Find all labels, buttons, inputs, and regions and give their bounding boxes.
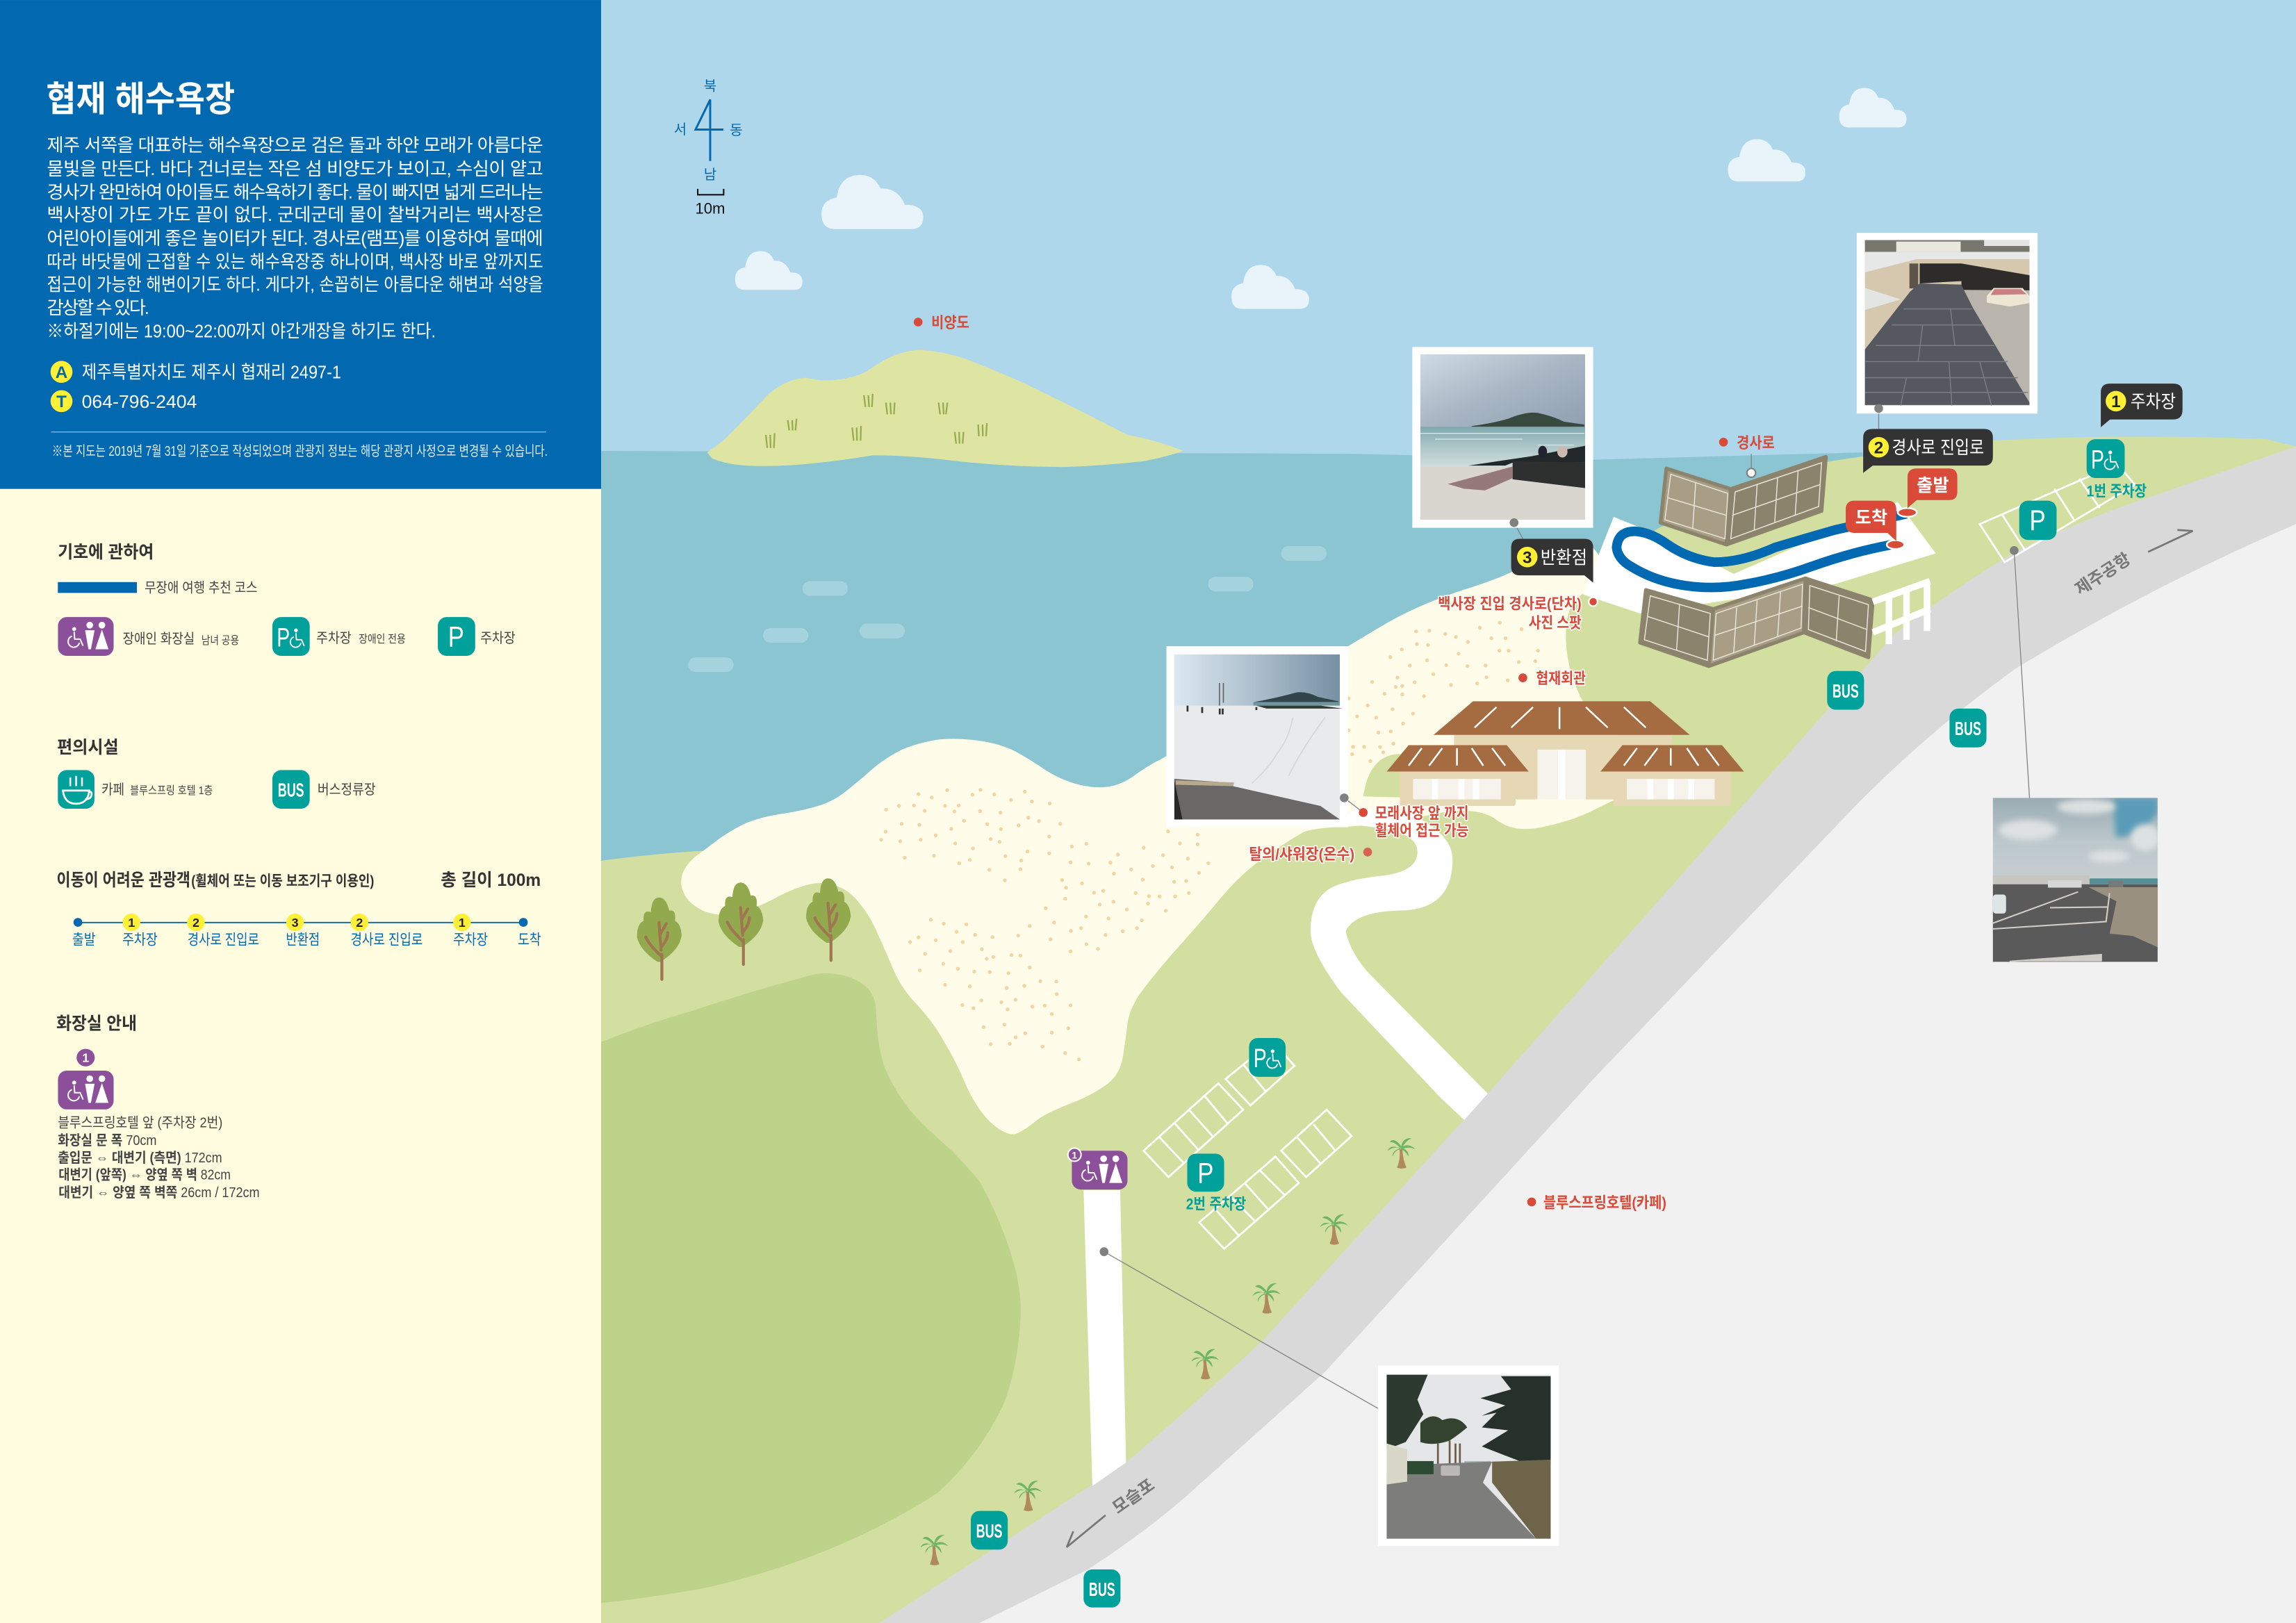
total length: 총 길이 100m: [441, 871, 541, 890]
label: Biyangdo: [914, 314, 969, 331]
upper stone wall: [1661, 456, 1826, 545]
heading: mobility-impaired course: (휠체어 또는 이동 보조기구 이용인): [191, 873, 374, 889]
legend: accessible parking: 주차장: [316, 630, 352, 646]
palms: [920, 1138, 1416, 1565]
route timeline: 경사로 진입로: [350, 932, 423, 948]
icon: parking: P: [2029, 504, 2046, 536]
compass: 북: [704, 79, 716, 94]
white railing: [1873, 582, 1930, 644]
route timeline: 2: [192, 916, 199, 930]
heading: mobility-impaired course: [57, 871, 374, 890]
callout: 2 ramp entrance: 경사로 진입로: [1892, 437, 1984, 458]
green patch beside building: [1363, 754, 1420, 798]
white walking path: [1311, 808, 1488, 1120]
clouds: [735, 88, 1907, 309]
building: Hyeopjae hall: [1386, 701, 1744, 806]
legend: bus stop: 버스정류장: [318, 782, 376, 798]
start marker: [1898, 508, 1917, 517]
description text: 경사가 완만하여 아이들도 해수욕하기 좋다. 물이 빠지면 넓게 드러나는: [47, 182, 543, 203]
compass: [674, 79, 743, 183]
label: ramp: 경사로: [1737, 434, 1775, 452]
label: ramp photo spot: [1438, 595, 1598, 632]
legend: parking: 주차장: [480, 630, 516, 646]
callout: 3 turnaround: [1511, 538, 1593, 583]
icon: bus 2: [1949, 709, 1987, 748]
icon: bus 2: BUS: [1955, 718, 1981, 739]
icon: toilet guide: [58, 1071, 114, 1110]
phone: 064-796-2404: [82, 391, 197, 412]
address: A: [56, 363, 67, 382]
description text: ※하절기에는 19:00~22:00까지 야간개장을 하기도 한다.: [47, 321, 436, 342]
label: Hyeopjae hall: 협재회관: [1536, 670, 1586, 687]
photo: ramp with island view: [1412, 347, 1593, 528]
scale bar: 10m: [695, 200, 725, 217]
icon: parking: [2019, 501, 2056, 540]
label: changing room: 탈의/샤워장(온수): [1249, 846, 1354, 863]
legend: bus stop: BUS: [278, 780, 304, 801]
icon: accessible parking 2: P: [1254, 1044, 1267, 1073]
compass: 동: [730, 123, 743, 138]
trees: [637, 878, 851, 980]
route timeline: 3: [292, 916, 299, 930]
panel: introduction: [0, 0, 601, 489]
route timeline: 출발: [72, 932, 96, 948]
label: wheelchair access: 휠체어 접근 가능: [1375, 822, 1468, 839]
scale bar: [695, 189, 725, 217]
callout: arrival: 도착: [1855, 508, 1887, 527]
panel: legend and guide: [0, 489, 601, 1623]
photo: road to beach: [1378, 1365, 1559, 1546]
icon: accessible parking 1: [2087, 439, 2124, 478]
icon: bus 4: [1083, 1570, 1120, 1608]
description text: [47, 135, 543, 342]
map illustration: [600, 0, 2296, 1623]
description text: 물빛을 만든다. 바다 건너로는 작은 섬 비양도가 보이고, 수심이 얕고: [47, 158, 543, 179]
toilet details: 블루스프링호텔 앞 (주차장 2번): [58, 1115, 222, 1131]
compass: 남: [704, 167, 716, 183]
icon: bus 4: BUS: [1089, 1579, 1115, 1600]
title: 협재 해수욕장: [46, 79, 235, 119]
compass: 서: [674, 122, 687, 138]
callout: start: [1908, 468, 1958, 508]
description text: 접근이 가능한 해변이기도 하다. 게다가, 손꼽히는 아름다운 해변과 석양을: [47, 274, 543, 295]
phone: T: [56, 393, 67, 411]
route timeline: 1: [459, 916, 466, 930]
callout: 3 turnaround: 3: [1523, 549, 1532, 568]
heading: toilet guide: 화장실 안내: [56, 1014, 137, 1033]
toilet badge: 1: [82, 1051, 89, 1065]
callout: 1 parking: [2101, 384, 2183, 427]
icon: bus 3: [971, 1511, 1008, 1549]
icon: parking 2: [1187, 1153, 1224, 1192]
photo: ramp entrance: [1857, 233, 2037, 413]
icon: bus 3: BUS: [976, 1520, 1003, 1542]
parking lot 1 lines: [1980, 464, 2135, 562]
sand dots: main beach: [881, 790, 1208, 1060]
road label: Moseulpo: 모슬포: [1109, 1476, 1158, 1518]
route timeline: 경사로 진입로: [188, 932, 259, 948]
ramp white base: [1583, 502, 1936, 613]
legend: cafe: [58, 770, 213, 809]
legend: accessible parking: 장애인 전용: [359, 633, 406, 645]
route timeline: 주차장: [453, 932, 488, 948]
label: ramp photo spot: 사진 스팟: [1529, 614, 1582, 632]
lower stone wall: [1640, 578, 1873, 666]
callout: 2 ramp entrance: 2: [1874, 439, 1883, 458]
icon: accessible toilet on map: [1068, 1148, 1127, 1189]
heading: facilities: 편의시설: [57, 738, 119, 757]
callout: 3 turnaround: 반환점: [1541, 547, 1587, 568]
callout: 1 parking: 1: [2111, 393, 2121, 411]
legend: accessible parking: [272, 617, 406, 656]
legend: parking: [438, 617, 516, 656]
legend: route: [58, 579, 257, 595]
route timeline: 2: [356, 916, 363, 930]
legend: cafe: 블루스프링 호텔 1층: [130, 784, 213, 797]
road: [878, 447, 2296, 1623]
road label: Jeju airport: 제주공항: [2072, 550, 2134, 599]
label: Blue Spring hotel: 블루스프링호텔(카페): [1543, 1194, 1666, 1211]
toilet details: [58, 1115, 260, 1201]
label: wheelchair access: [1359, 805, 1468, 839]
ground beyond road: [978, 524, 2296, 1623]
toilet details: 대변기 ⇔ 양옆 쪽 벽쪽 26cm / 172cm: [58, 1185, 260, 1201]
legend: bus stop: [272, 770, 376, 809]
address: 제주특별자치도 제주시 협재리 2497-1: [82, 362, 341, 383]
label: Biyangdo: 비양도: [931, 314, 969, 331]
label: Hyeopjae hall: [1518, 670, 1586, 687]
dark green field: [600, 973, 1021, 1603]
route timeline: 반환점: [286, 932, 320, 948]
arrow to Jeju airport: [2148, 530, 2192, 552]
legend: cafe: 카페: [101, 782, 124, 798]
description text: 제주 서쪽을 대표하는 해수욕장으로 검은 돌과 하얀 모래가 아름다운: [47, 135, 543, 156]
toilet badge: [76, 1049, 95, 1066]
icon: accessible parking 2: [1249, 1038, 1286, 1077]
marker dots: [1099, 404, 2019, 1256]
sky: [600, 0, 2296, 1623]
callout: 2 ramp entrance: [1863, 429, 1993, 473]
description text: 백사장이 가도 가도 끝이 없다. 군데군데 물이 찰박거리는 백사장은: [47, 204, 543, 225]
callout: arrival: [1846, 501, 1896, 541]
callout: start: 출발: [1917, 476, 1949, 495]
route timeline: [72, 914, 541, 948]
toilet details: 대변기 (앞쪽) ⇔ 양옆 쪽 벽 82cm: [58, 1167, 231, 1183]
description text: 감상할 수 있다.: [47, 297, 149, 318]
label: parking 1: 1번 주차장: [2087, 482, 2147, 500]
icon: bus 1: BUS: [1832, 680, 1859, 702]
heading: symbols: 기호에 관하여: [58, 543, 154, 562]
arrow to Moseulpo: [1067, 1515, 1106, 1547]
label: ramp photo spot: 백사장 진입 경사로(단차): [1438, 595, 1582, 613]
arrival marker: [1887, 541, 1904, 549]
description text: 따라 바닷물에 근접할 수 있는 해수욕장중 하나이며, 백사장 바로 앞까지도: [47, 252, 543, 272]
label: ramp: [1719, 434, 1775, 452]
sand beach: [681, 544, 1653, 1135]
route timeline: 1: [128, 916, 135, 930]
sea: [600, 451, 1862, 937]
green land: [600, 436, 2296, 1623]
route timeline: 도착: [518, 932, 541, 948]
white access road to toilet: [1083, 1190, 1126, 1486]
route timeline: 주차장: [122, 932, 158, 948]
label: parking 2: 2번 주차장: [1186, 1196, 1246, 1213]
legend: accessible toilet: 남녀 공용: [202, 634, 239, 647]
icon: accessible toilet on map: 1: [1072, 1150, 1077, 1160]
sand dots: near building: [1349, 623, 1538, 761]
leader lines: [1104, 409, 2029, 1408]
island: Biyangdo: [707, 350, 1183, 467]
description text: 어린아이들에게 좋은 놀이터가 된다. 경사로(램프)를 이용하여 물때에: [47, 228, 543, 249]
heading: mobility-impaired course: 이동이 어려운 관광객: [57, 871, 190, 890]
icon: parking 2: P: [1197, 1157, 1213, 1189]
icon: accessible parking 1: P: [2091, 445, 2104, 475]
photo: parking lot 1: [1993, 798, 2160, 962]
legend: parking: P: [448, 620, 464, 652]
parking lot 2 lines: [1144, 1041, 1352, 1249]
route: blue accessible course: [1616, 514, 1907, 588]
callout: 1 parking: 주차장: [2131, 391, 2176, 412]
toilet details: 출입문 ⇔ 대변기 (측면) 172cm: [58, 1150, 222, 1166]
legend: accessible toilet: [58, 617, 239, 656]
icon: bus 1: [1827, 671, 1864, 710]
legend: accessible toilet: 장애인 화장실: [123, 631, 195, 647]
legend: accessible parking: P: [277, 623, 290, 652]
sea waves: [688, 546, 1327, 672]
legend: route: 무장애 여행 추천 코스: [145, 579, 257, 595]
label: wheelchair access: 모래사장 앞 까지: [1375, 805, 1468, 822]
toilet details: 화장실 문 폭 70cm: [58, 1132, 156, 1148]
photo: beach access: [1167, 646, 1348, 827]
disclaimer: ※본 지도는 2019년 7월 31일 기준으로 작성되었으며 관광지 정보는 해당 관광지 사정으로 변경될 수 있습니다.: [52, 443, 548, 459]
